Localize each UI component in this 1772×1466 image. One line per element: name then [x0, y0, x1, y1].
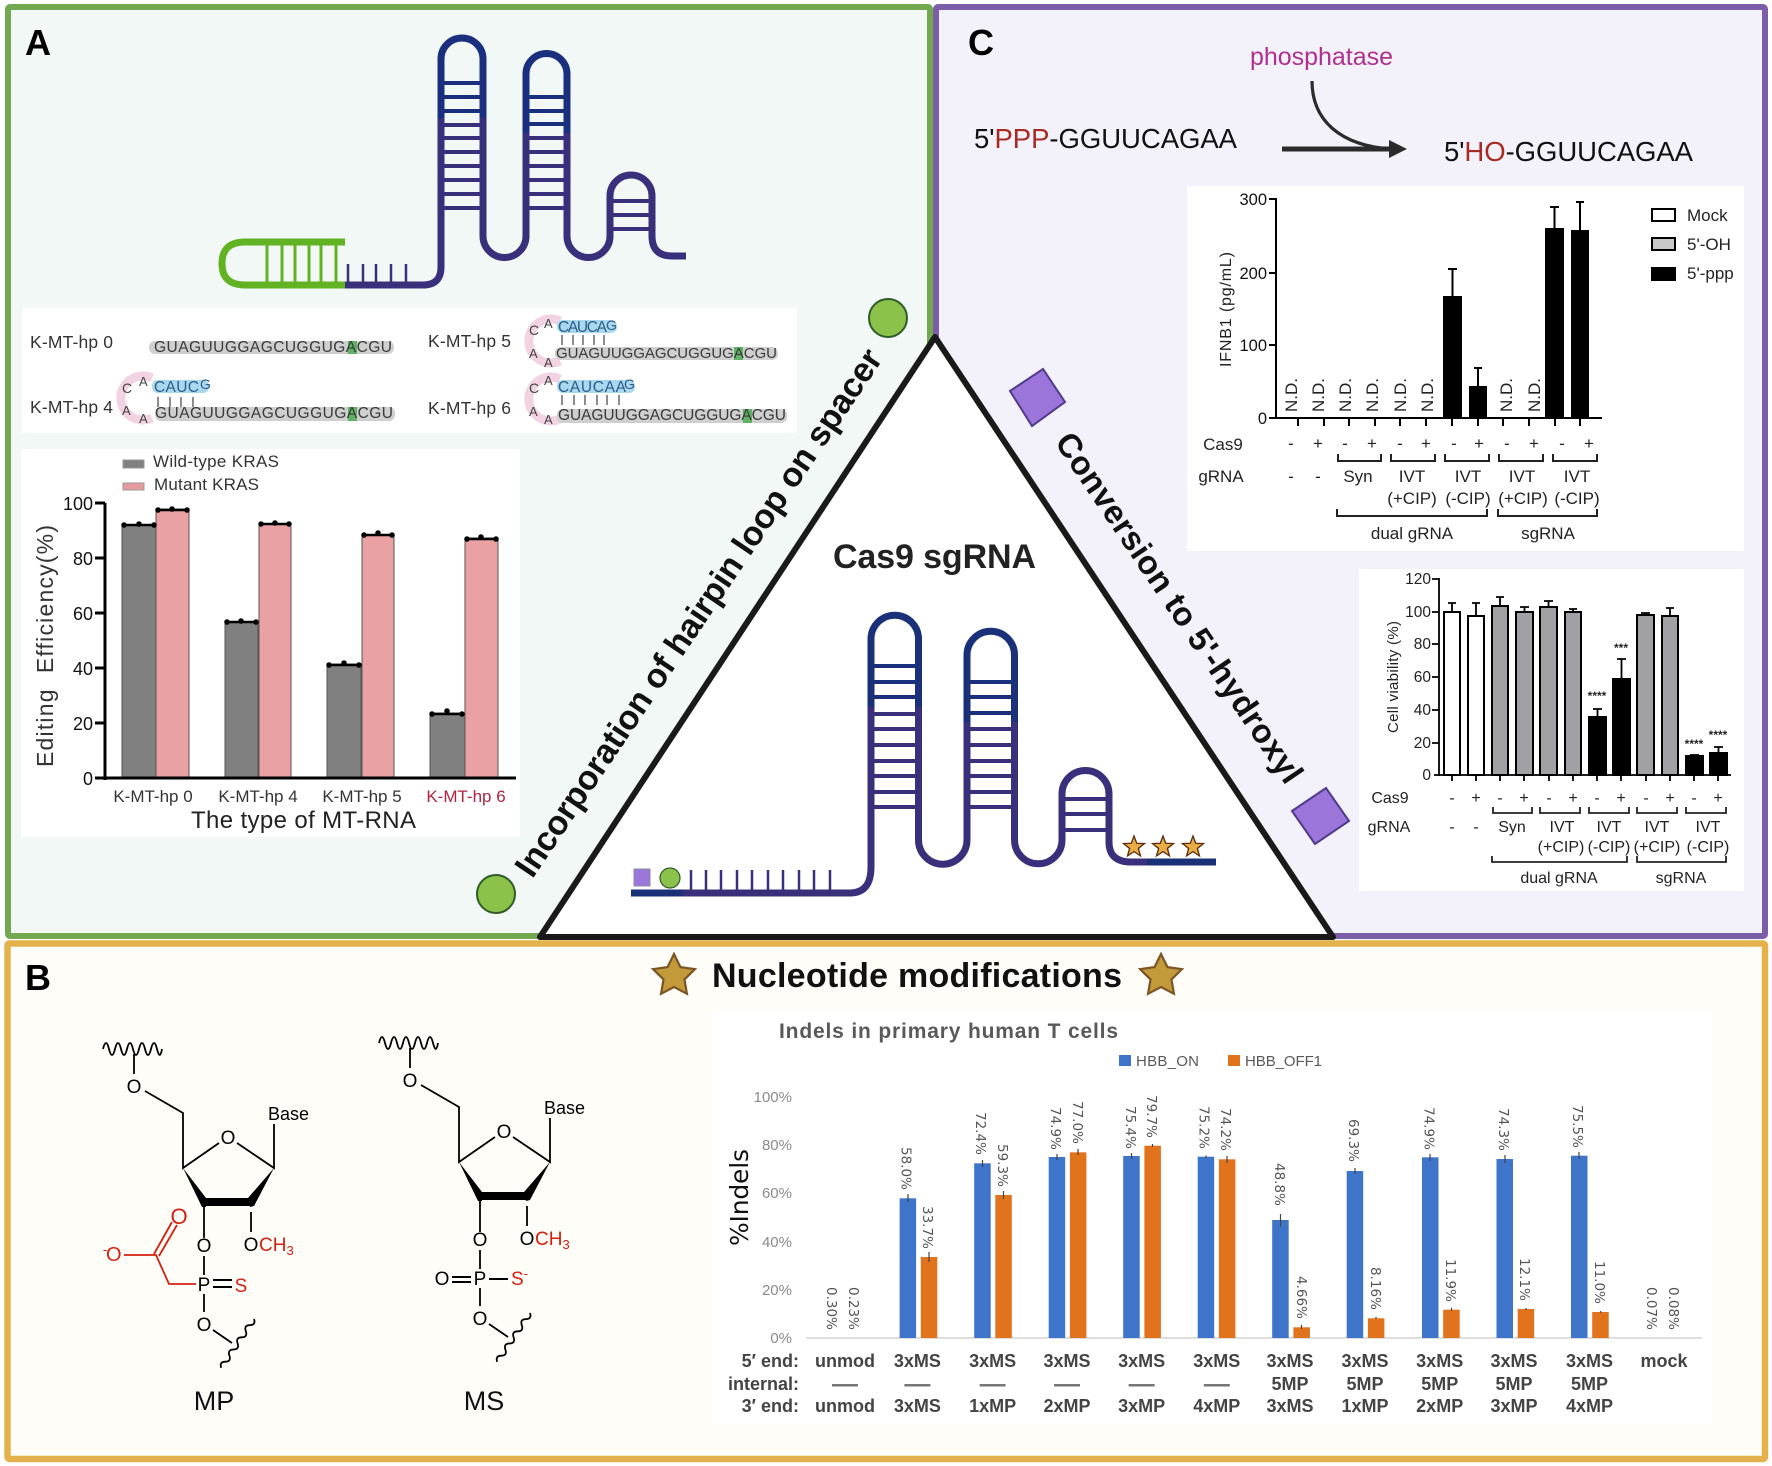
icon: green circle modification	[660, 868, 680, 888]
y tick labels: 20	[1414, 735, 1431, 752]
condition table: (-CIP)	[1445, 489, 1491, 508]
title text: Nucleotide modifications	[712, 957, 1122, 995]
y tick labels: 20%	[762, 1282, 792, 1299]
rotated heading: hairpin loop: Incorporation of hairpin loop on spacer	[508, 342, 890, 884]
y axis title: %Indels	[725, 1149, 754, 1246]
modification table: 3xMS	[1566, 1351, 1613, 1371]
modification table: 3xMS	[894, 1396, 941, 1416]
bar chart: IFNB1	[1187, 186, 1744, 551]
panel: C 5'-hydroxyl background	[936, 7, 1765, 936]
y tick labels: 300	[1239, 191, 1267, 209]
data labels: 11.9%	[1442, 1259, 1458, 1302]
N.D. labels: N.D.	[1525, 378, 1544, 412]
condition table: sgRNA	[1656, 870, 1707, 887]
substrate: 5'PPP-GGUUCAGAA	[974, 123, 1238, 154]
bars	[1443, 228, 1589, 418]
significance stars: ***	[1614, 641, 1628, 655]
condition table: -	[1288, 434, 1294, 453]
icon: left star	[653, 954, 695, 994]
data labels: 59.3%	[994, 1144, 1010, 1187]
chemical structure: MS: O	[473, 1309, 487, 1330]
condition table: IVT	[1455, 467, 1481, 486]
modification table: 3xMS	[1266, 1396, 1314, 1416]
N.D. labels	[1282, 378, 1544, 412]
y tick labels: 40	[1414, 702, 1431, 719]
y tick labels: 120	[1405, 571, 1431, 588]
sequence: K-MT-hp 4: A	[139, 411, 148, 426]
chemical structure: MP: S	[235, 1276, 247, 1297]
rotated heading: 5'-hydroxyl: Conversion to 5'-hydroxyl	[1048, 425, 1311, 790]
condition table: -	[1546, 790, 1552, 807]
x axis title: The type of MT-RNA	[191, 807, 416, 834]
y tick labels: 80	[1414, 636, 1431, 653]
x tick labels: K-MT-hp 5	[322, 787, 402, 806]
chemical structure: MP: O	[106, 1244, 122, 1266]
legend: 5'-ppp	[1687, 264, 1734, 283]
y tick labels: 100	[1405, 604, 1431, 621]
chemical structure: MP: P	[198, 1275, 210, 1296]
sequence: K-MT-hp 0: GUAGUUGGAGCUGGUGACGU	[154, 339, 392, 356]
y tick labels	[63, 494, 93, 789]
sequence: K-MT-hp 5: K-MT-hp 5	[428, 331, 511, 351]
chemical structure: MP: O	[127, 1077, 141, 1098]
triangle: Cas9 sgRNA	[540, 337, 1333, 937]
sequence: K-MT-hp 5: A	[529, 346, 538, 361]
condition table: IVT	[1645, 819, 1670, 836]
y tick labels	[1405, 571, 1431, 784]
N.D. labels: N.D.	[1391, 378, 1410, 412]
data labels: 0.23%	[845, 1287, 861, 1330]
icon: purple square modification	[634, 869, 650, 886]
panel: A hairpin loop background	[8, 7, 930, 936]
sequence: K-MT-hp 6: C	[529, 380, 539, 396]
condition table: (+CIP)	[1387, 489, 1437, 508]
chemical structure: MS: O	[473, 1230, 487, 1251]
bars	[1444, 606, 1727, 775]
y axis title: Editing Efficiency(%)	[32, 525, 58, 767]
data labels: 0.30%	[823, 1287, 839, 1330]
icon: purple diamond bottom	[1292, 788, 1349, 844]
condition table: Cas9	[1203, 435, 1243, 454]
chemical structure: MS: O	[435, 1269, 449, 1290]
data labels: 75.4%	[1122, 1106, 1138, 1149]
condition table: -	[1559, 434, 1565, 453]
condition table: dual gRNA	[1371, 524, 1454, 543]
modification table: 1xMP	[969, 1396, 1016, 1416]
significance stars	[1588, 641, 1728, 751]
condition table: Syn	[1498, 819, 1526, 836]
y axis title: IFNB1 (pg/mL)	[1218, 252, 1235, 367]
sequence: K-MT-hp 4: C	[122, 380, 132, 396]
chemical structure: MP: O	[197, 1315, 211, 1336]
condition table: -	[1315, 467, 1321, 486]
chemical structure: MS: 3	[562, 1237, 570, 1252]
modification table: 3xMS	[1416, 1351, 1463, 1371]
chemical structure: MP: Base	[268, 1104, 309, 1124]
sequence: K-MT-hp 6: A	[544, 412, 553, 427]
chemical structure: MS: O	[497, 1122, 511, 1143]
axes	[1432, 578, 1731, 781]
modification table: internal:	[728, 1374, 799, 1394]
modification table: mock	[1640, 1351, 1688, 1371]
sequence: K-MT-hp 6	[428, 373, 787, 427]
chemical structure: MS: P	[474, 1269, 486, 1290]
N.D. labels: N.D.	[1282, 378, 1301, 412]
condition table: +	[1421, 434, 1431, 453]
modification table: 4xMP	[1566, 1396, 1613, 1416]
condition table: gRNA	[1368, 819, 1411, 836]
condition table	[1198, 434, 1600, 543]
label: MS: MS	[464, 1386, 504, 1416]
condition table: -	[1397, 434, 1403, 453]
chart title: Indels in primary human T cells	[779, 1020, 1118, 1043]
sequence: K-MT-hp 4: CAUC	[154, 379, 199, 396]
legend: KRAS: Mutant KRAS	[154, 475, 259, 494]
modification table: 3′ end:	[742, 1396, 799, 1416]
legend: HBB_OFF1	[1245, 1053, 1322, 1070]
error bars	[1448, 597, 1723, 756]
reaction: phosphatase conversion	[974, 43, 1694, 167]
y tick labels: 60%	[762, 1185, 792, 1202]
modification table: 5MP	[1571, 1374, 1608, 1394]
diagram: Cas9 sgRNA with modifications	[631, 615, 1216, 893]
sequence: K-MT-hp 4: A	[122, 403, 131, 418]
condition table: +	[1313, 434, 1323, 453]
modification table: unmod	[815, 1351, 875, 1371]
sequence: K-MT-hp 6: A	[529, 404, 538, 419]
condition table: +	[1568, 790, 1578, 807]
chemical structure: MP: CH	[259, 1235, 286, 1256]
data labels: 8.16%	[1367, 1267, 1383, 1310]
y tick labels: 100%	[754, 1089, 792, 1106]
icon: right star	[1140, 954, 1182, 994]
condition table: (-CIP)	[1687, 839, 1729, 856]
y tick labels: 60	[73, 604, 93, 624]
sequence: K-MT-hp 4: K-MT-hp 4	[30, 397, 113, 417]
N.D. labels: N.D.	[1497, 378, 1516, 412]
data labels: 58.0%	[898, 1147, 914, 1190]
baseline	[806, 1337, 1702, 1339]
condition table: -	[1451, 434, 1457, 453]
y tick labels: 0	[1258, 410, 1267, 428]
enzyme label: phosphatase	[1250, 43, 1393, 71]
condition table: -	[1594, 790, 1600, 807]
label C: C	[968, 22, 994, 63]
legend: KRAS: Wild-type KRAS	[153, 452, 279, 471]
y tick labels: 100	[1239, 337, 1267, 355]
modification table: 3xMS	[1341, 1351, 1389, 1371]
error bars	[908, 1144, 1600, 1329]
chemical structure: MS: -	[524, 1266, 528, 1281]
modification table: 3xMS	[1266, 1351, 1314, 1371]
modification table: 5MP	[1346, 1374, 1384, 1394]
sequence: K-MT-hp 4: A	[139, 374, 148, 389]
condition table: -	[1497, 790, 1503, 807]
condition table: -	[1691, 790, 1697, 807]
modification table	[728, 1351, 1688, 1416]
sequence: K-MT-hp 5: G	[606, 317, 617, 333]
orange bars: HBB_OFF1	[921, 1146, 1609, 1338]
data labels: 79.7%	[1143, 1095, 1159, 1138]
chemical structure: MP: O	[197, 1236, 211, 1257]
condition table: -	[1473, 819, 1479, 836]
legend	[1652, 206, 1734, 283]
condition table: IVT	[1550, 819, 1575, 836]
data labels: 75.5%	[1569, 1105, 1585, 1148]
significance stars: ****	[1685, 737, 1704, 751]
condition table: IVT	[1509, 467, 1535, 486]
data labels: 12.1%	[1516, 1258, 1532, 1301]
chemical structure: MS: Base	[544, 1098, 585, 1118]
y tick labels: 80%	[762, 1137, 792, 1154]
condition table: (-CIP)	[1588, 839, 1630, 856]
condition table: (+CIP)	[1498, 489, 1548, 508]
condition table	[1368, 790, 1729, 887]
icons: nucleotide stars	[1124, 836, 1203, 856]
panel: K-MT-hp sequence designs	[22, 308, 797, 433]
condition table: +	[1616, 790, 1626, 807]
diagram: hairpin-modified sgRNA	[222, 38, 686, 285]
sequence: K-MT-hp 4	[30, 374, 395, 426]
label A: A	[25, 22, 51, 63]
y tick labels	[754, 1089, 792, 1347]
condition table: +	[1474, 434, 1484, 453]
modification table: 1xMP	[1341, 1396, 1389, 1416]
data labels: 74.2%	[1217, 1108, 1233, 1151]
y tick labels: 40	[73, 659, 93, 679]
condition table: +	[1713, 790, 1723, 807]
modification table: 3xMS	[894, 1351, 941, 1371]
product: 5'HO-GGUUCAGAA	[1444, 136, 1694, 167]
condition table: IVT	[1564, 467, 1590, 486]
heading: Nucleotide modifications	[653, 954, 1182, 995]
sequence: K-MT-hp 5: GUAGUUGGAGCUGGUGACGU	[556, 345, 777, 362]
blue bars: HBB_ON	[900, 1156, 1588, 1338]
data labels: 33.7%	[919, 1206, 935, 1249]
modification table: 2xMP	[1416, 1396, 1463, 1416]
sequence: K-MT-hp 0: K-MT-hp 0	[30, 332, 113, 352]
x tick labels: K-MT-hp 0	[113, 787, 193, 806]
data points	[122, 508, 498, 716]
condition table: sgRNA	[1521, 524, 1576, 543]
y tick labels: 100	[63, 494, 93, 514]
modification table: 4xMP	[1193, 1396, 1240, 1416]
modification table: 3xMS	[1193, 1351, 1240, 1371]
N.D. labels: N.D.	[1309, 378, 1328, 412]
modification table: 3xMP	[1118, 1396, 1165, 1416]
condition table: (-CIP)	[1554, 489, 1600, 508]
condition table: -	[1449, 819, 1455, 836]
legend: KRAS	[123, 452, 279, 494]
icon: green circle bottom	[477, 875, 515, 913]
bars: wild-type and mutant	[122, 509, 498, 778]
condition table: (+CIP)	[1538, 839, 1584, 856]
modification table: 5′ end:	[742, 1351, 799, 1371]
legend	[1119, 1053, 1322, 1070]
sequence: K-MT-hp 5	[428, 316, 778, 370]
data labels: 75.2%	[1196, 1106, 1212, 1149]
condition table: gRNA	[1198, 467, 1244, 486]
modification table: 3xMS	[969, 1351, 1016, 1371]
chemical structure: MS: O	[403, 1071, 417, 1092]
sequence: K-MT-hp 5: A	[544, 316, 553, 331]
y tick labels	[1239, 191, 1267, 428]
chemical structure: MP: 3	[286, 1243, 294, 1258]
condition table: +	[1471, 790, 1481, 807]
bar chart: cell viability	[1359, 569, 1744, 891]
modification table: unmod	[815, 1396, 875, 1416]
condition table: -	[1643, 790, 1649, 807]
significance stars: ****	[1709, 728, 1728, 742]
condition table: +	[1529, 434, 1539, 453]
chemical structure: MS	[379, 1037, 585, 1362]
legend: Mock	[1687, 206, 1728, 225]
modification table: 2xMP	[1043, 1396, 1091, 1416]
condition table: -	[1288, 467, 1294, 486]
data labels: 69.3%	[1345, 1119, 1361, 1162]
label B: B	[25, 957, 51, 998]
condition table: -	[1504, 434, 1510, 453]
condition table: -	[1342, 434, 1348, 453]
data labels: 77.0%	[1069, 1101, 1085, 1144]
modification table: 5MP	[1271, 1374, 1309, 1394]
y tick labels: 60	[1414, 669, 1431, 686]
data labels: 72.4%	[972, 1112, 988, 1155]
condition table: Syn	[1343, 467, 1373, 486]
condition table: dual gRNA	[1520, 870, 1598, 887]
sequence: K-MT-hp 4: G	[200, 376, 211, 392]
N.D. labels: N.D.	[1336, 378, 1355, 412]
axes	[1269, 198, 1602, 426]
data labels: 74.9%	[1047, 1107, 1063, 1150]
N.D. labels: N.D.	[1418, 378, 1437, 412]
label: MP: MP	[194, 1386, 234, 1416]
x tick labels: K-MT-hp 6	[426, 787, 506, 806]
data labels: 48.8%	[1271, 1163, 1287, 1206]
modification table: 3xMS	[1490, 1351, 1538, 1371]
condition table: IVT	[1696, 819, 1721, 836]
chemical structure: MS: CH	[535, 1229, 562, 1250]
bar chart: editing efficiency	[21, 449, 520, 837]
data labels	[823, 1095, 1681, 1330]
chemical structure: MP: -	[103, 1242, 107, 1257]
N.D. labels: N.D.	[1363, 378, 1382, 412]
modification table: 3xMS	[1118, 1351, 1165, 1371]
condition table: Cas9	[1371, 790, 1409, 807]
chemical structure: MP: O	[221, 1128, 235, 1149]
sequence: K-MT-hp 6: G	[624, 376, 635, 392]
sequence: K-MT-hp 5: A	[544, 355, 553, 370]
x tick labels: K-MT-hp 4	[218, 787, 298, 806]
y axis title: Cell viability (%)	[1385, 621, 1402, 733]
y tick labels: 0%	[770, 1330, 792, 1347]
data labels: 11.0%	[1591, 1261, 1607, 1304]
significance stars: ****	[1588, 689, 1607, 703]
heading: Cas9 sgRNA: Cas9 sgRNA	[833, 538, 1036, 576]
panel: B nucleotide modifications background	[8, 944, 1765, 1459]
data labels: 74.3%	[1495, 1108, 1511, 1151]
data labels: 4.66%	[1293, 1276, 1309, 1319]
chemical structure: MP: O	[244, 1235, 258, 1256]
bar chart: indels in primary human T cells	[712, 1012, 1712, 1425]
sequence: K-MT-hp 0	[30, 332, 394, 356]
icon: green circle top	[869, 299, 907, 337]
sequence: K-MT-hp 6: A	[544, 373, 553, 388]
icon: purple diamond top	[1010, 369, 1065, 426]
sequence: K-MT-hp 6: K-MT-hp 6	[428, 398, 511, 418]
legend: 5'-OH	[1687, 235, 1731, 254]
data labels: 0.08%	[1665, 1287, 1681, 1330]
condition table: -	[1449, 790, 1455, 807]
chemical structure: MS: O	[520, 1229, 534, 1250]
y tick labels: 200	[1239, 265, 1267, 283]
legend: HBB_ON	[1136, 1053, 1199, 1070]
y tick labels: 0	[83, 769, 93, 789]
chemical structure: MP: O	[170, 1204, 188, 1229]
modification table: 5MP	[1421, 1374, 1458, 1394]
modification table: 3xMS	[1043, 1351, 1091, 1371]
condition table: IVT	[1399, 467, 1425, 486]
y tick labels: 80	[73, 549, 93, 569]
condition table: (+CIP)	[1634, 839, 1680, 856]
condition table: +	[1665, 790, 1675, 807]
chemical structure: MS: S	[511, 1269, 524, 1290]
data labels: 0.07%	[1643, 1287, 1659, 1330]
y tick labels: 40%	[762, 1234, 792, 1251]
sequence: K-MT-hp 6: GUAGUUGGAGCUGGUGACGU	[558, 407, 786, 424]
condition table: +	[1367, 434, 1377, 453]
sequence: K-MT-hp 4: GUAGUUGGAGCUGGUGACGU	[155, 405, 393, 422]
arrow	[1282, 81, 1407, 158]
condition table: +	[1519, 790, 1529, 807]
sequence: K-MT-hp 5: CAUCA	[558, 319, 608, 336]
sequence: K-MT-hp 5: C	[529, 322, 539, 338]
chemical structure: MP	[103, 1043, 309, 1368]
condition table: +	[1584, 434, 1594, 453]
y tick labels: 0	[1422, 767, 1431, 784]
y tick labels: 20	[73, 714, 93, 734]
axes	[95, 503, 516, 780]
error bars	[1448, 202, 1584, 386]
condition table: IVT	[1597, 819, 1622, 836]
modification table: 5MP	[1495, 1374, 1533, 1394]
x tick labels	[113, 787, 506, 806]
sequence: K-MT-hp 6: CAUCAA	[558, 379, 627, 396]
modification table: 3xMP	[1490, 1396, 1538, 1416]
data labels: 74.9%	[1420, 1107, 1436, 1150]
